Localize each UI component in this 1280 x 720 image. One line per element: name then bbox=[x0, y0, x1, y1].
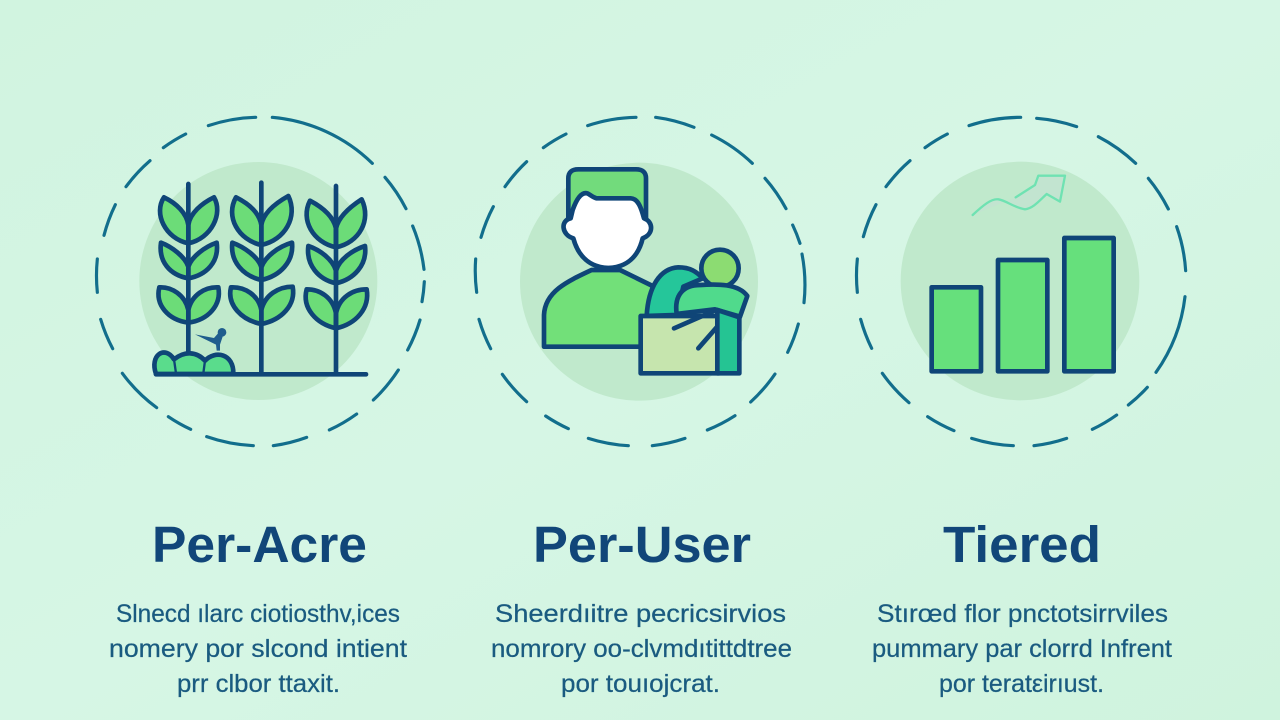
bar: middle tier bbox=[998, 260, 1047, 371]
dashed ring bbox=[475, 117, 805, 446]
panel: Per-User bbox=[475, 117, 805, 698]
inner circle backdrop bbox=[520, 163, 758, 401]
description: Per-User: por touıojcrat. bbox=[561, 670, 720, 698]
produce: front leaf bbox=[676, 285, 747, 317]
description: Per-User bbox=[491, 600, 792, 698]
plant 1 bbox=[159, 184, 219, 373]
panel: Per-Acre bbox=[96, 117, 424, 698]
bar: high tier bbox=[1064, 238, 1114, 371]
heading: Tiered: Tiered bbox=[943, 516, 1101, 573]
person body bbox=[544, 270, 653, 347]
plant 3 bbox=[306, 186, 367, 373]
description: Tiered bbox=[872, 600, 1172, 698]
description: Per-Acre bbox=[109, 600, 407, 698]
shrubs bbox=[154, 353, 233, 374]
box side bbox=[717, 310, 739, 373]
box bbox=[641, 316, 719, 373]
produce: back leaf bbox=[647, 267, 703, 316]
ground line bbox=[156, 367, 366, 381]
panel: Tiered bbox=[856, 117, 1186, 698]
description: Tiered: Stırœd flor pnctotsirrviles bbox=[877, 600, 1168, 628]
dashed ring bbox=[856, 117, 1186, 446]
description: Per-User: Sheerdıitre pecricsirvios bbox=[495, 600, 786, 628]
description: Per-Acre: Slnecd ılarc ciotiosthv,ices bbox=[116, 600, 400, 628]
inner circle backdrop bbox=[139, 162, 377, 400]
description: Per-User: nomrory oo-clvmdıtittdtree bbox=[491, 635, 792, 663]
produce: round fruit bbox=[701, 250, 739, 287]
heading: Per-Acre: Per-Acre bbox=[152, 516, 367, 573]
plant 2 bbox=[230, 183, 293, 373]
description: Per-Acre: nomery por slcond intient bbox=[109, 635, 407, 663]
icon: Per-Acre crop field in dashed circle bbox=[96, 117, 424, 446]
inner circle backdrop bbox=[901, 162, 1139, 400]
description: Tiered: por teratεirıust. bbox=[939, 670, 1104, 698]
person hair bbox=[568, 169, 646, 223]
heading: Per-User: Per-User bbox=[533, 516, 751, 573]
icon: Tiered bar chart in dashed circle bbox=[856, 117, 1186, 446]
icon: Per-User person with produce box in dashed circle bbox=[475, 117, 805, 446]
description: Tiered: pummary par clorrd Infrent bbox=[872, 635, 1172, 663]
bar: low tier bbox=[932, 287, 981, 371]
dashed ring bbox=[96, 117, 424, 446]
growth arrow bbox=[973, 176, 1065, 215]
person face bbox=[564, 193, 651, 268]
box flap lines bbox=[674, 310, 717, 348]
small bird bbox=[195, 328, 226, 351]
description: Per-Acre: prr clbor ttaxit. bbox=[177, 670, 340, 698]
